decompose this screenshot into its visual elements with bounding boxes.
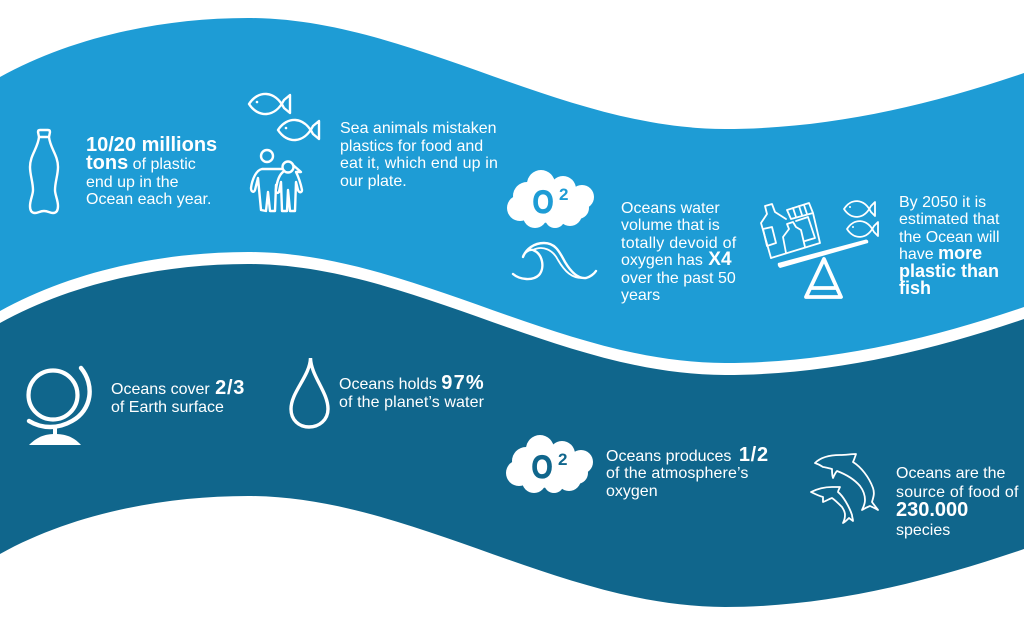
icon: oxygen cloud	[507, 170, 594, 228]
icon: oxygen cloud dark	[506, 435, 593, 493]
text: plastic tonnage: 10/20 millions	[86, 134, 217, 156]
text: sea animals	[340, 120, 498, 190]
text: atmosphere oxygen: oxygen	[606, 483, 658, 500]
icon: oxygen cloud dark: O	[532, 450, 553, 486]
text: plastic tonnage	[86, 134, 217, 208]
text: plastic tonnage: tons of plastic	[86, 152, 196, 174]
text: food species: source of food of	[896, 484, 1019, 501]
text: food species: species	[896, 522, 950, 539]
text: sea animals: Sea animals mistaken	[340, 120, 497, 137]
text: oxygen devoid water: volume that is	[621, 217, 720, 234]
text: more plastic than fish: estimated that	[899, 211, 1000, 228]
text: sea animals: plastics for food and	[340, 138, 483, 155]
text: planet water: of the planet’s water	[339, 394, 485, 411]
text: food species: 230.000	[896, 499, 968, 521]
icon: scale weighing plastic against fish	[761, 201, 878, 297]
text: more plastic than fish: By 2050 it is	[899, 194, 986, 211]
text: oxygen devoid water: over the past 50	[621, 270, 736, 287]
text: sea animals: our plate.	[340, 173, 407, 190]
icon: globe	[28, 368, 90, 445]
icon: oxygen cloud: 2	[559, 185, 568, 204]
icon: plastic bottle	[30, 130, 58, 213]
icon: wave	[513, 243, 596, 279]
text: more plastic than fish	[899, 194, 1000, 298]
text: atmosphere oxygen: of the atmosphere’s	[606, 465, 749, 482]
text: more plastic than fish: have more	[899, 243, 982, 263]
panel: light blue wave, plastic and threats	[0, 18, 1024, 363]
text: atmosphere oxygen: Oceans produces 1/2	[606, 444, 769, 466]
icon: dolphins	[811, 454, 878, 523]
icon: fish above people	[249, 94, 319, 211]
panel: dark blue wave, ocean facts	[0, 264, 1024, 607]
text: more plastic than fish: fish	[899, 278, 931, 298]
text: oxygen devoid water: Oceans water	[621, 200, 720, 217]
text: plastic tonnage: Ocean each year.	[86, 191, 211, 208]
text: food species: Oceans are the	[896, 465, 1006, 482]
text: sea animals: eat it, which end up in	[340, 155, 498, 172]
text: more plastic than fish: plastic than	[899, 261, 999, 281]
text: earth surface: Oceans cover 2/3	[111, 377, 245, 399]
text: earth surface: of Earth surface	[111, 399, 224, 416]
text: food species	[896, 465, 1019, 539]
text: plastic tonnage: end up in the	[86, 174, 179, 191]
text: planet water	[339, 372, 485, 411]
text: oxygen devoid water: years	[621, 287, 660, 304]
text: earth surface	[111, 377, 245, 416]
text: planet water: Oceans holds 97%	[339, 372, 485, 394]
icon: oxygen cloud: O	[532, 185, 554, 221]
icon: oxygen cloud dark: 2	[558, 450, 567, 469]
text: oxygen devoid water	[621, 200, 737, 304]
text: more plastic than fish: the Ocean will	[899, 229, 1000, 246]
icon: water drop	[291, 358, 328, 427]
text: atmosphere oxygen	[606, 444, 769, 500]
text: oxygen devoid water: totally devoid of	[621, 235, 737, 252]
text: oxygen devoid water: oxygen has X4	[621, 249, 732, 270]
